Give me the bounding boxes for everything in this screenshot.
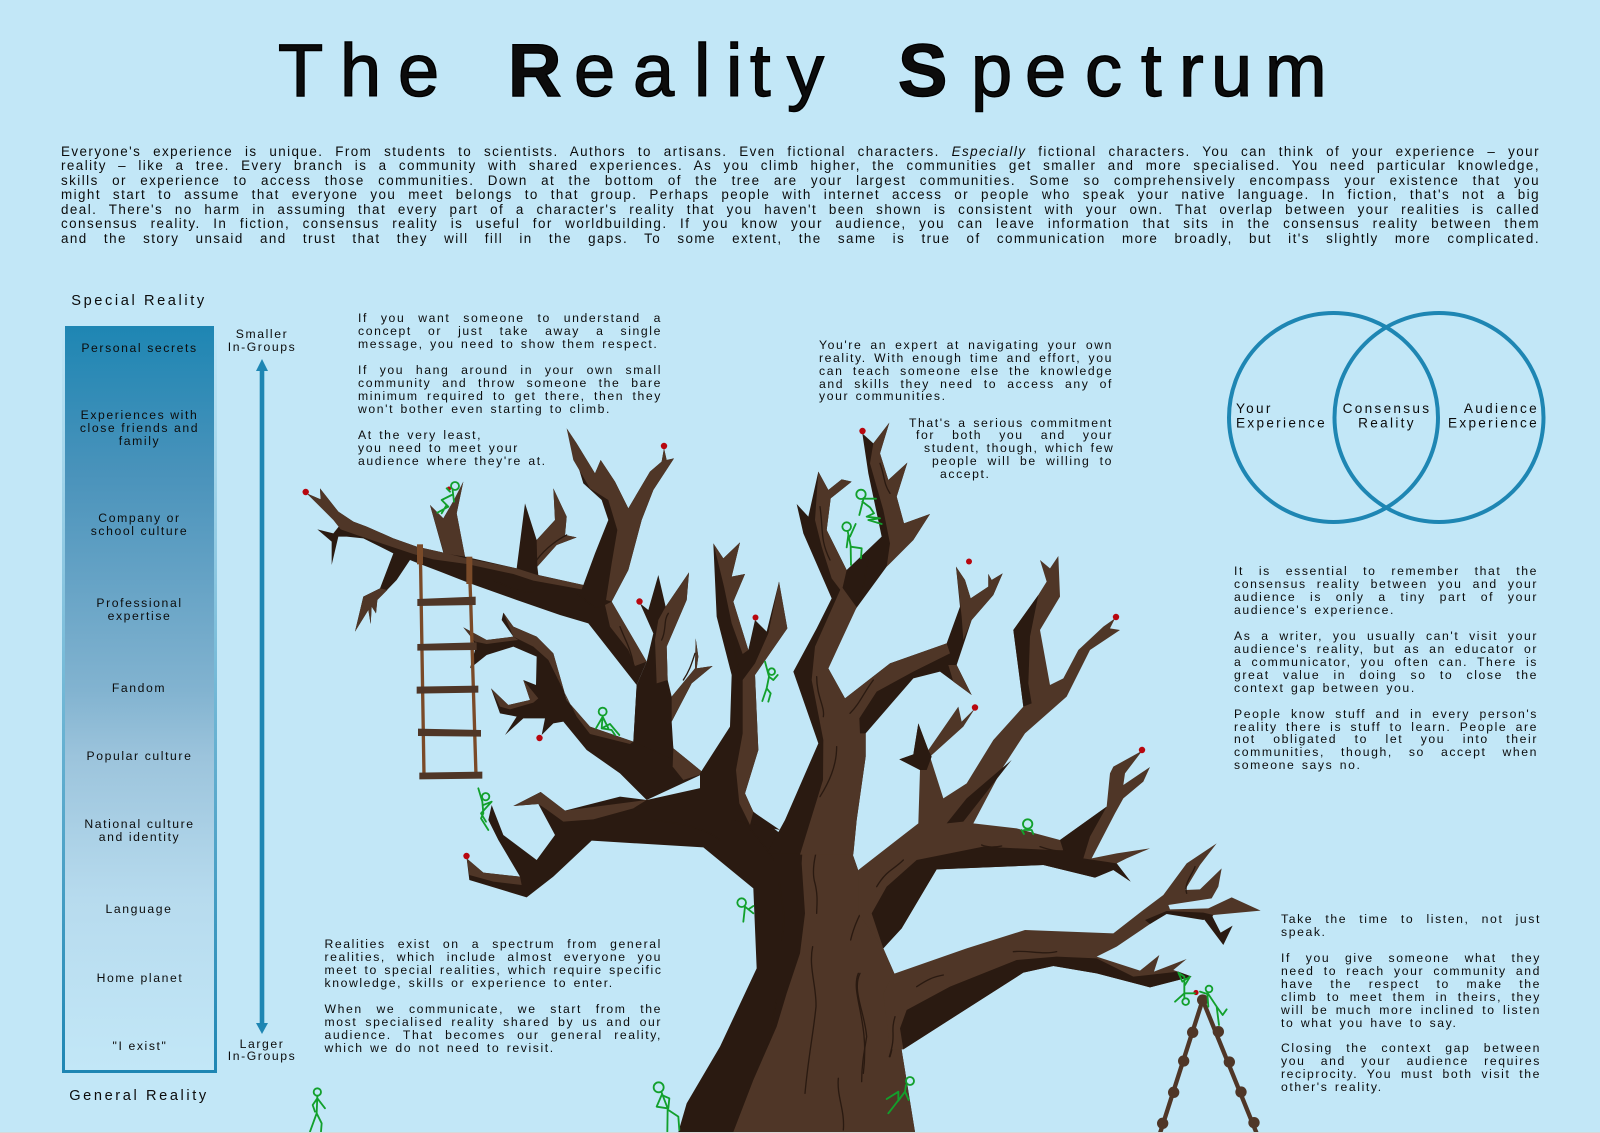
tree: right branches — [856, 556, 1261, 1073]
larger in-groups label — [228, 1037, 296, 1063]
rope ladder bottom right — [1157, 994, 1260, 1133]
text block: expert at your own reality: your communities. — [819, 389, 947, 403]
text block: show them respect: message, you need to show them respect. — [358, 337, 658, 351]
text block: show them respect: won't bother even starting to climb. — [358, 402, 611, 416]
text block: serious commitment: That's a serious commitment — [909, 416, 1113, 430]
venn diagram: Experience — [1236, 416, 1327, 430]
text block: listen and reciprocity: Closing the context gap between — [1281, 1041, 1541, 1055]
double-headed arrow — [256, 359, 268, 1034]
text block: show them respect — [358, 311, 662, 468]
text block: consensus reality is tiny: someone says no. — [1234, 758, 1362, 772]
text block: listen and reciprocity: Take the time to listen, not just — [1281, 912, 1541, 926]
stick figures on the left branches — [437, 482, 619, 735]
title: pectrum — [971, 29, 1327, 112]
text block: show them respect: community and throw someone the bare — [358, 376, 662, 390]
larger in-groups label: Larger — [240, 1037, 284, 1051]
text block: expert at your own reality — [819, 338, 1113, 403]
text block: realities exist on a spectrum: Realities exist on a spectrum from general — [324, 937, 662, 951]
text block: listen and reciprocity: speak. — [1281, 925, 1327, 939]
text block: listen and reciprocity: have the respect to make the — [1281, 977, 1541, 991]
text block: listen and reciprocity: If you give someone what they — [1281, 951, 1541, 965]
spectrum gradient bar: Company or — [98, 511, 181, 525]
spectrum gradient bar — [62, 326, 217, 1073]
text block: consensus reality is tiny: audience's reality, but as an educator or — [1234, 642, 1538, 656]
text block: realities exist on a spectrum: most specialised reality shared by us and our — [324, 1015, 662, 1029]
walking stick figure — [310, 1088, 325, 1132]
title: eality — [574, 29, 824, 112]
text block: show them respect: At the very least, — [358, 428, 482, 442]
venn diagram — [1229, 313, 1544, 522]
stick figures in the upper branches — [762, 490, 882, 702]
venn diagram: Your — [1236, 401, 1273, 416]
spectrum gradient bar: and identity — [99, 830, 180, 844]
spectrum gradient bar: National culture — [84, 817, 195, 831]
text block: realities exist on a spectrum: realities, which include almost everyone you — [324, 950, 662, 964]
text block: realities exist on a spectrum: meet to special realities, which require specific — [324, 963, 663, 977]
intro paragraph: consensus reality. In fiction, consensus reality is useful for worldbuilding. If you know your audience, you can leave information that sits in the consensus reality between them — [61, 216, 1540, 231]
text block: listen and reciprocity: climb to meet them in theirs, they — [1281, 990, 1541, 1004]
text block: listen and reciprocity: need to reach your community and — [1281, 964, 1541, 978]
text block: serious commitment: people will be willing to — [932, 454, 1113, 468]
intro paragraph: might start to assume that everyone you meet belongs to that group. Perhaps people with internet access or people who speak your native language. In fiction, that's not a big — [61, 187, 1540, 202]
spectrum gradient bar: Personal secrets — [81, 341, 198, 355]
text block: expert at your own reality: reality. With enough time and effort, you — [819, 351, 1113, 365]
text block: consensus reality is tiny: audience's experience. — [1234, 603, 1395, 617]
stick figures on the right — [887, 819, 1227, 1113]
venn diagram: Consensus — [1343, 401, 1431, 416]
text block: show them respect: audience where they're at. — [358, 454, 547, 468]
text block: realities exist on a spectrum: audience. That becomes our general reality, — [324, 1028, 662, 1042]
text block: realities exist on a spectrum: When we communicate, we start from the — [324, 1002, 662, 1016]
text block: expert at your own reality: and skills they need to access any of — [819, 376, 1113, 390]
smaller in-groups label: Smaller — [236, 327, 288, 341]
text block: consensus reality is tiny: People know stuff and in every person's — [1234, 707, 1538, 721]
text block: consensus reality is tiny: audience is only a tiny part of your — [1234, 590, 1538, 604]
text block: consensus reality is tiny: As a writer, you usually can't visit your — [1234, 629, 1538, 643]
venn diagram: Reality — [1358, 416, 1416, 430]
spectrum gradient bar: school culture — [91, 524, 188, 538]
larger in-groups label: In-Groups — [228, 1049, 296, 1063]
tree: centre branches — [700, 423, 1003, 855]
spectrum gradient bar: Language — [105, 902, 173, 916]
text block: listen and reciprocity: to what you have to say. — [1281, 1016, 1457, 1030]
text block: realities exist on a spectrum: knowledge, skills or experience to enter. — [324, 976, 614, 990]
spectrum gradient bar: family — [119, 434, 160, 448]
general reality heading: General Reality — [69, 1088, 209, 1104]
venn diagram: Experience — [1448, 416, 1539, 430]
smaller in-groups label — [228, 327, 296, 354]
text block: consensus reality is tiny: reality there is stuff to learn. People are — [1234, 720, 1538, 734]
text block: show them respect: concept or just take away a single — [358, 324, 662, 338]
text block: expert at your own reality: You're an expert at navigating your own — [819, 338, 1113, 352]
spectrum gradient bar: close friends and — [80, 421, 199, 435]
text block: consensus reality is tiny: great value in doing so to close the — [1234, 668, 1538, 682]
intro paragraph: deal. There's no harm in assuming that every part of a character's reality that you haven't been shown is consistent with your own. That overlap between your realities is called — [61, 202, 1540, 217]
text block: consensus reality is tiny — [1234, 564, 1538, 772]
text block: listen and reciprocity: will be much more inclined to listen — [1281, 1003, 1541, 1017]
text block: listen and reciprocity: reciprocity. You must both visit the — [1281, 1067, 1541, 1081]
spectrum gradient bar: Fandom — [112, 681, 166, 695]
intro paragraph — [61, 144, 1540, 246]
text block: serious commitment: accept. — [940, 467, 990, 481]
text block: consensus reality is tiny: not obligated to let you into their — [1234, 732, 1538, 746]
text block: show them respect: minimum required to get there, then they — [358, 389, 662, 403]
text block: listen and reciprocity — [1281, 912, 1541, 1094]
text block: realities exist on a spectrum — [324, 937, 663, 1055]
text block: listen and reciprocity: other's reality. — [1281, 1080, 1383, 1094]
intro paragraph: skills or experience to access those communities. Down at the bottom of the tree are your largest communities. Some so comprehensively encompass your existence that you — [61, 173, 1540, 188]
intro paragraph: Everyone's experience is unique. From students to scientists. Authors to artisans. Even fictional characters. Especially fictional characters. You can think of your experience – your — [61, 144, 1540, 158]
venn diagram: Audience — [1464, 401, 1539, 416]
intro paragraph: reality – like a tree. Every branch is a community with shared experiences. As you climb higher, the communities get smaller and more specialised. You need particular knowledge, — [61, 158, 1540, 173]
text block: consensus reality is tiny: a communicator, you often can. There is — [1234, 655, 1538, 669]
spectrum gradient bar: Home planet — [97, 971, 183, 985]
text block: consensus reality is tiny: communities, though, so accept when — [1234, 745, 1538, 759]
spectrum gradient bar: Experiences with — [81, 408, 198, 422]
text block: consensus reality is tiny: context gap between you. — [1234, 681, 1416, 695]
title: R — [508, 29, 561, 112]
rope ladder on branch — [417, 544, 482, 779]
text block: expert at your own reality: can teach someone else the knowledge — [819, 364, 1113, 378]
spectrum gradient bar: Popular culture — [87, 749, 192, 763]
title: The — [278, 29, 439, 112]
text block: realities exist on a spectrum: which we do not need to revisit. — [324, 1041, 555, 1055]
tree: trunk and lower-left branch — [467, 780, 915, 1132]
spectrum gradient bar: Professional — [96, 596, 183, 610]
text block: serious commitment: student, though, which few — [924, 441, 1114, 455]
spectrum gradient bar: "I exist" — [113, 1039, 167, 1053]
text block: listen and reciprocity: you and your audience requires — [1281, 1054, 1541, 1068]
intro paragraph: and the story unsaid and trust that they will fill in the gaps. To some extent, the same is true of communication more broadly, but it's slightly more complicated. — [61, 231, 1540, 246]
text block: serious commitment — [909, 416, 1114, 481]
special reality heading: Special Reality — [71, 293, 207, 309]
red apples — [302, 428, 1199, 995]
text block: consensus reality is tiny: It is essential to remember that the — [1234, 564, 1538, 578]
tree illustration — [302, 423, 1261, 1133]
spectrum gradient bar: expertise — [108, 609, 171, 623]
text block: show them respect: If you want someone to understand a — [358, 311, 662, 325]
smaller in-groups label: In-Groups — [228, 340, 296, 354]
title: S — [898, 29, 947, 112]
text block: show them respect: you need to meet your — [358, 441, 519, 455]
text block: consensus reality is tiny: consensus reality between you and your — [1234, 577, 1538, 591]
text block: show them respect: If you hang around in your own small — [358, 363, 662, 377]
tree: left branches — [307, 428, 713, 800]
stick figures on the trunk — [478, 788, 753, 1132]
text block: serious commitment: for both you and your — [916, 428, 1113, 442]
